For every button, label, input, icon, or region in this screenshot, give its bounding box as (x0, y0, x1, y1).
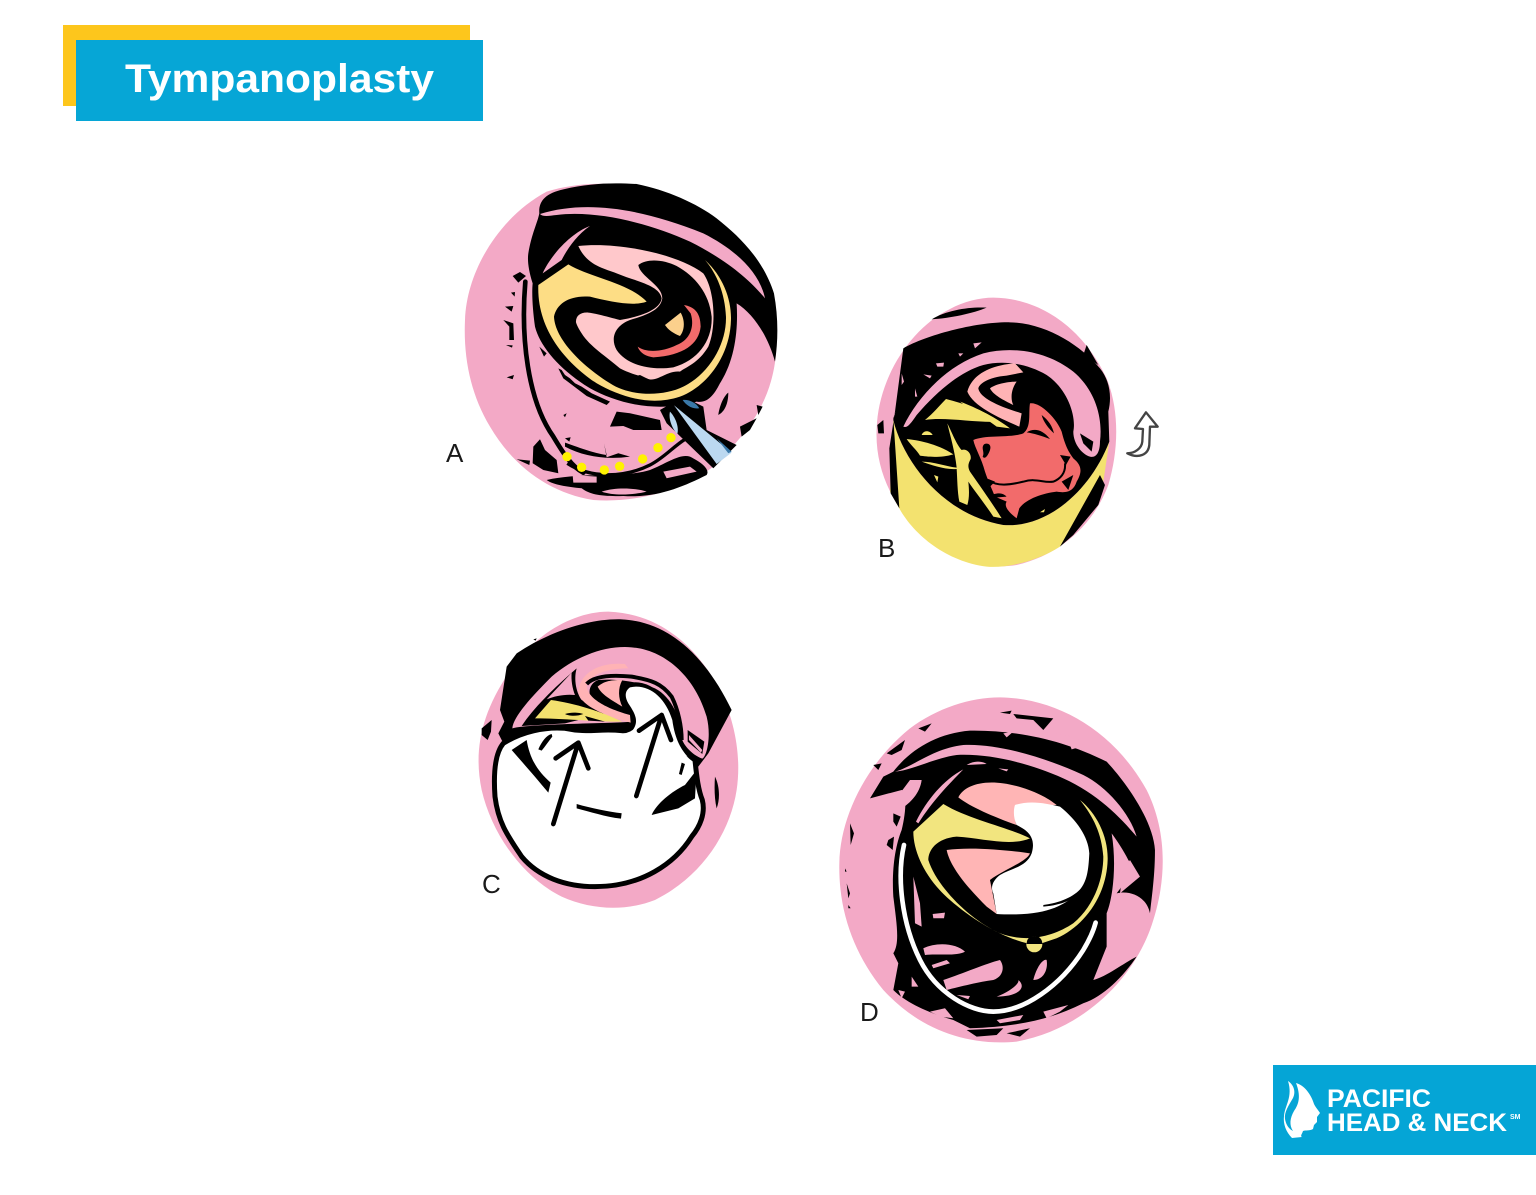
panel D yellow annulus (913, 800, 1108, 945)
logo: Pacific Head & Neck: SM (1510, 1114, 1521, 1121)
panel: A (465, 183, 777, 500)
panel B yellow ossicle and handle (907, 399, 1010, 518)
label A: A (446, 438, 464, 468)
panel D black tissue (870, 731, 1155, 1028)
panel A peach ossicle (665, 313, 684, 336)
panel B black tissue (893, 322, 1110, 525)
panel A black malleus spiral (614, 260, 712, 368)
panel C arrows (553, 715, 671, 824)
panel B left black edge (877, 307, 1105, 547)
panel D black specks (845, 711, 1053, 1037)
panel A upper pale flap (543, 226, 590, 273)
panel C pink sliver (689, 735, 702, 753)
panel D pink tissue remnants (898, 860, 1140, 1023)
panel C black line around flap (587, 676, 682, 740)
panel C white graft area (494, 685, 703, 887)
panel C yellow flap (535, 700, 622, 722)
panel C black band (498, 619, 732, 767)
panel A red tissue (638, 305, 701, 357)
panel C pale pink fold (578, 664, 631, 723)
panel: B (877, 298, 1158, 567)
panel A pink strip (540, 207, 765, 298)
panel B pale pink flap (967, 363, 1023, 427)
panel C flap black details (508, 707, 605, 722)
panel C black patch in arch (688, 730, 704, 754)
panel D black marks on graft (1043, 873, 1092, 914)
panel A incision dots (562, 433, 676, 475)
icon: face profile (1284, 1081, 1320, 1138)
panel C pink triangle (547, 673, 575, 699)
panel B pink background (877, 298, 1116, 566)
panel D pink strip (895, 745, 1137, 837)
panel A lower canal incision line (567, 439, 685, 475)
panel: C (479, 612, 738, 908)
panel B wavy line on red (988, 463, 1065, 485)
panel B pink specks (902, 342, 982, 397)
panel A right specks (718, 393, 763, 437)
panel B curved arrow icon (1127, 412, 1158, 456)
panel C pink background (479, 612, 738, 908)
logo text: PACIFIC (1327, 1085, 1431, 1113)
panel B black inside arch (1080, 433, 1093, 452)
panel A pink background (465, 184, 777, 500)
panel C black remnants (482, 638, 719, 819)
panel D white canal line (901, 845, 1096, 1012)
panel A instrument (660, 397, 737, 468)
panel D pink specks top (873, 719, 1087, 770)
title banner (63, 25, 483, 121)
panel D pink background (839, 697, 1163, 1042)
panel D white graft (992, 802, 1089, 914)
panel A black cavity detail (562, 309, 690, 390)
panel: D (839, 697, 1163, 1042)
label B: B (878, 533, 895, 563)
panel B red middle ear (973, 403, 1080, 518)
panel A black tissue (528, 183, 777, 407)
panel B yellow speck (1040, 509, 1045, 512)
panel C re-drawn white upper cavity (626, 687, 688, 757)
panel D upper left pink fold (900, 762, 1008, 823)
panel A dark specks left (503, 272, 662, 442)
panel B pink arch (903, 350, 1101, 457)
panel C black wedge under arch (522, 668, 605, 726)
panel A pink speck lower (573, 467, 697, 495)
panel D umbo dot (1026, 936, 1042, 952)
panel C pink arch (512, 647, 709, 759)
logo: Pacific Head & Neck (1273, 1065, 1536, 1155)
panel A yellow annulus (538, 260, 731, 401)
panel B yellow retracted flap (890, 420, 1109, 567)
panel A ear canal wall line (524, 282, 583, 473)
label C: C (482, 869, 501, 899)
label D: D (860, 997, 879, 1027)
panel A pale pink cavity (575, 245, 714, 379)
title: Tympanoplasty (125, 57, 435, 101)
panel B black detail on red (983, 415, 1073, 519)
panel D salmon cavity (947, 782, 1057, 914)
panel A lower tissue (517, 439, 707, 496)
logo: Pacific Head & Neck: HEAD & NECK (1327, 1109, 1507, 1137)
